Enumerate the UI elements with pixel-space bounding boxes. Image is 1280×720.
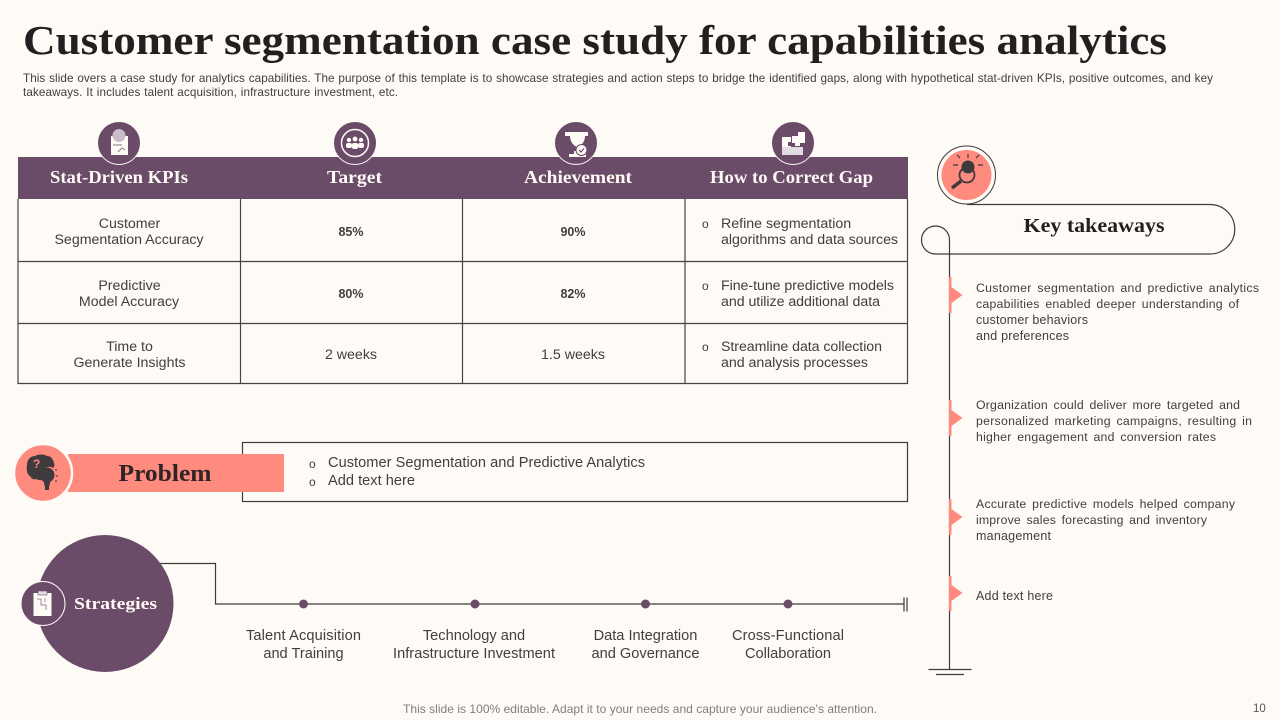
row 1: algorithms and data sources xyxy=(721,232,898,248)
icon: KPI report xyxy=(98,122,140,164)
KPI table xyxy=(18,122,908,384)
row 2: 80% xyxy=(338,287,364,301)
takeaway 2 xyxy=(949,398,1252,444)
row 1: 90% xyxy=(560,225,586,239)
row 3: and analysis processes xyxy=(721,355,868,371)
problem bullets: Add text here xyxy=(328,473,415,489)
takeaway 2: Organization could deliver more targeted and xyxy=(976,398,1240,412)
strategy label: technology xyxy=(393,628,555,662)
row 1: 85% xyxy=(338,225,364,239)
takeaway 2: higher engagement and conversion rates xyxy=(976,430,1216,444)
subtitle description: This slide overs a case study for analytics capabilities. The purpose of this template is to showcase strategies and action steps to bridge the identified gaps, along with hypothetical stat-driven KPIs, positive outcomes, and key xyxy=(23,72,1213,85)
strategies circle xyxy=(36,535,174,672)
strategy label: talent: and Training xyxy=(263,646,344,662)
row 2: Fine-tune predictive models xyxy=(721,278,894,294)
problem banner xyxy=(68,454,284,492)
strategies heading: Strategies xyxy=(74,594,157,613)
row 2: Predictive xyxy=(98,278,161,294)
column headings: How to Correct Gap xyxy=(710,167,873,187)
problem bullets: o xyxy=(309,457,316,471)
column headings xyxy=(50,167,873,187)
title: Customer segmentation case study for capabilities analytics xyxy=(23,17,1167,63)
strategy label: cross-functional xyxy=(732,628,844,662)
takeaway 1: Customer segmentation and predictive analytics xyxy=(976,281,1259,295)
column headings: Target xyxy=(327,167,382,187)
row 1: Customer xyxy=(99,216,161,232)
strategy label: talent xyxy=(246,628,361,662)
takeaway 3: Accurate predictive models helped company xyxy=(976,497,1236,511)
takeaway 2: personalized marketing campaigns, resulting in xyxy=(976,414,1252,428)
column headings: Achievement xyxy=(524,167,632,187)
row 1: Segmentation Accuracy xyxy=(54,232,204,248)
problem bullets xyxy=(309,455,645,489)
key takeaways panel xyxy=(922,146,1259,674)
problem text box xyxy=(242,442,908,502)
problem heading: Problem xyxy=(118,461,212,487)
strategy label: data: and Governance xyxy=(592,646,699,662)
takeaway 3: management xyxy=(976,529,1052,543)
row 3: Streamline data collection xyxy=(721,339,882,355)
takeaway 3: improve sales forecasting and inventory xyxy=(976,513,1208,527)
row 3: 2 weeks xyxy=(325,347,377,363)
row 2: Model Accuracy xyxy=(79,294,180,310)
row 1: o xyxy=(702,217,709,231)
table grid xyxy=(18,199,908,384)
problem bullets: o xyxy=(309,475,316,489)
row 2 xyxy=(79,278,894,310)
row 2: and utilize additional data xyxy=(721,294,880,310)
icon: insight bulb magnifier xyxy=(938,146,996,204)
page number: 10 xyxy=(1253,703,1266,715)
icon: strategy clipboard xyxy=(21,582,65,626)
column headings: Stat-Driven KPIs xyxy=(50,167,188,187)
strategy label: cross-functional: Collaboration xyxy=(745,646,831,662)
strategy label: data: Data Integration xyxy=(594,628,697,644)
takeaway 1: and preferences xyxy=(976,329,1069,343)
takeaway 4 xyxy=(949,576,1053,611)
takeaway 1: capabilities enabled deeper understanding of xyxy=(976,297,1240,311)
row 3: Time to xyxy=(106,339,153,355)
footer note: This slide is 100% editable. Adapt it to your needs and capture your audience's attention. xyxy=(403,702,877,716)
problem bullets: Customer Segmentation and Predictive Analytics xyxy=(328,455,645,471)
icon: trophy xyxy=(554,122,598,164)
takeaway 3 xyxy=(949,497,1236,543)
row 1: Refine segmentation xyxy=(721,216,851,232)
strategy label: cross-functional: Cross-Functional xyxy=(732,628,844,644)
subtitle description xyxy=(23,72,1213,99)
table header band xyxy=(18,157,908,199)
icon: target audience xyxy=(334,122,376,164)
row 3 xyxy=(74,339,882,371)
icon: problem brain and bulb: ? xyxy=(33,457,40,471)
strategy label: talent: Talent Acquisition xyxy=(246,628,361,644)
row 2: 82% xyxy=(560,287,586,301)
icon: puzzle xyxy=(772,122,814,164)
icon: problem brain and bulb xyxy=(14,444,72,502)
takeaway 1 xyxy=(949,277,1259,343)
key takeaways heading: Key takeaways xyxy=(1024,215,1165,237)
row 3: Generate Insights xyxy=(74,355,186,371)
row 3: 1.5 weeks xyxy=(541,347,605,363)
strategy label: technology: Technology and xyxy=(423,628,525,644)
strategies section xyxy=(21,535,907,672)
row 3: o xyxy=(702,340,709,354)
takeaways frame and spine xyxy=(922,204,1235,674)
row 2: o xyxy=(702,279,709,293)
timeline markers xyxy=(299,600,792,608)
takeaway 1: customer behaviors xyxy=(976,313,1088,327)
subtitle description: takeaways. It includes talent acquisition, infrastructure investment, etc. xyxy=(23,86,398,99)
takeaway 4: Add text here xyxy=(976,589,1053,603)
problem section xyxy=(14,442,908,502)
timeline connector xyxy=(160,564,907,612)
strategy label: data xyxy=(592,628,699,662)
strategy label: technology: Infrastructure Investment xyxy=(393,646,555,662)
row 1 xyxy=(54,216,898,248)
